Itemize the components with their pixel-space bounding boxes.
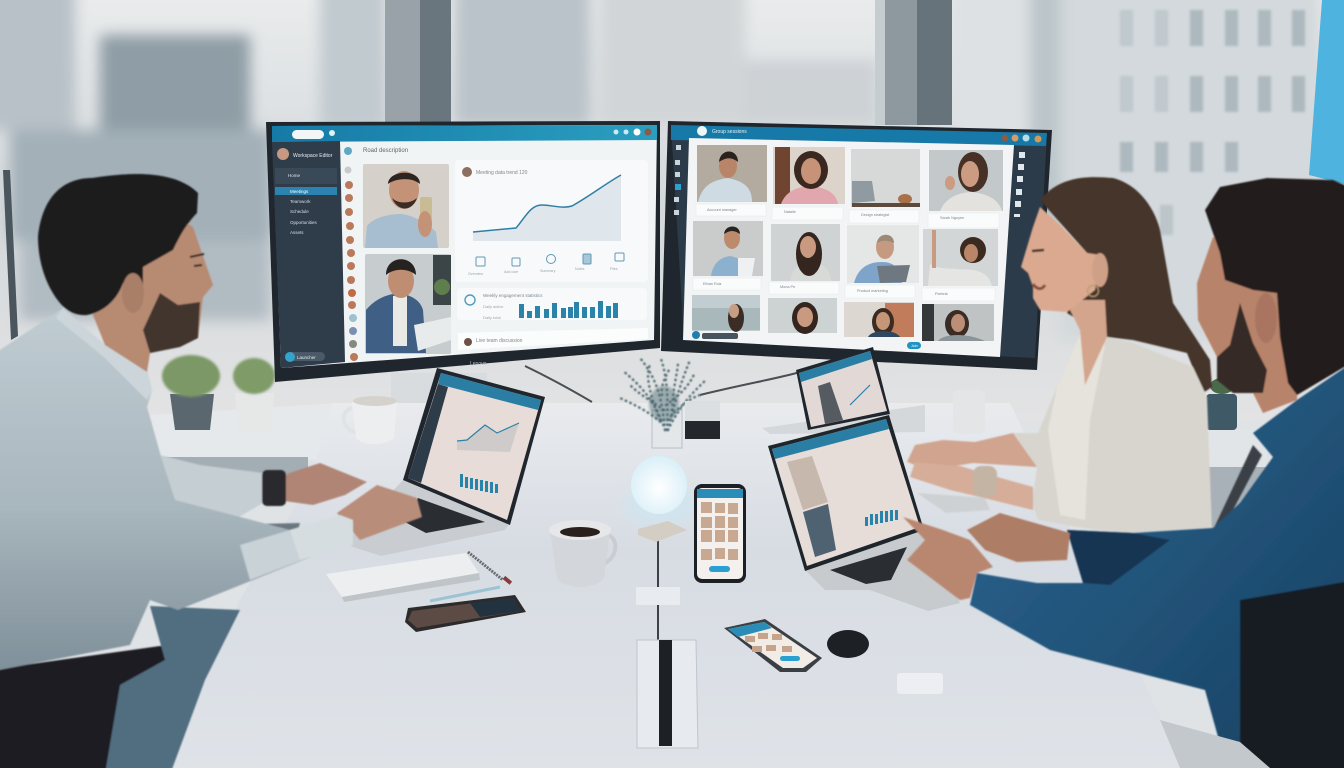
beard — [143, 293, 200, 353]
centre divider on table — [637, 540, 698, 748]
monitor: right video grid: Sarah Nguyen — [940, 216, 964, 220]
icon: plant white pot — [233, 358, 275, 432]
window frames — [3, 0, 1344, 340]
call toolbar: Join — [911, 344, 918, 348]
far sleeve shadow — [1067, 530, 1170, 585]
laptop behind — [917, 493, 990, 513]
call toolbar — [692, 331, 921, 349]
foliage — [620, 356, 706, 430]
bar chart card: Weekly engagement statistics — [483, 293, 543, 298]
hair — [1205, 178, 1344, 395]
hoop earring — [1088, 286, 1098, 296]
person: woman — [907, 177, 1212, 533]
smile — [1033, 284, 1045, 289]
shirt body — [0, 308, 353, 672]
chart card: Overview — [468, 272, 483, 276]
tile row 1 — [697, 145, 1003, 211]
bar chart card: Daily total — [483, 315, 501, 320]
chart card — [455, 160, 648, 282]
neck and face — [87, 215, 213, 372]
keyboard — [830, 547, 907, 584]
header title: Road description — [363, 148, 408, 154]
left sidebar icons — [674, 145, 681, 215]
monitor: right video grid: Group sessions — [712, 129, 747, 135]
monitor: right video grid: Account manager — [707, 208, 737, 212]
chart card: Add user — [504, 270, 519, 274]
gap under far arm — [200, 523, 300, 565]
near hand — [903, 517, 993, 600]
ear — [1255, 293, 1277, 343]
keyboard — [401, 498, 485, 533]
vase — [652, 410, 682, 448]
video grid panel — [683, 138, 1014, 357]
forearm near and hand — [910, 462, 1033, 510]
dark lower shadow — [1240, 580, 1344, 768]
monitor: left dashboard: Teamwork — [290, 199, 311, 204]
shelf with plants — [150, 355, 1267, 532]
monitor: left dashboard: Workspace Editor — [293, 153, 333, 159]
hair back — [1040, 177, 1212, 393]
monitor: right video grid — [661, 121, 1052, 370]
flower vase and hub — [620, 356, 720, 448]
far hand — [967, 513, 1070, 562]
table — [168, 403, 1185, 768]
monitor: left dashboard: Home — [288, 173, 301, 178]
footer card — [458, 328, 648, 350]
footer card: Live team discussion — [476, 338, 523, 344]
chart card: Summary — [540, 269, 556, 273]
chart card: Meeting data trend 120 — [476, 170, 528, 176]
monitor: right video grid: Patricia — [935, 292, 949, 296]
hub device — [685, 401, 720, 421]
jeans — [104, 606, 240, 768]
phone flat left — [405, 595, 526, 632]
tile row 2 — [693, 221, 998, 286]
window grid of right building — [1120, 10, 1305, 235]
shirt torso — [970, 360, 1344, 768]
chart card: Notes — [575, 267, 585, 271]
laptop: left person — [350, 368, 545, 556]
face — [1021, 207, 1100, 312]
monitor: left dashboard: Opportunities — [290, 220, 318, 225]
far sleeve — [160, 455, 263, 530]
right sidebar icons — [1014, 152, 1025, 217]
base — [805, 530, 960, 611]
collar — [56, 308, 152, 400]
bar chart card — [457, 288, 647, 320]
cuff — [290, 515, 353, 560]
hand on laptop — [277, 463, 367, 505]
tile labels row 2 — [693, 278, 995, 301]
screen frame — [768, 415, 924, 571]
person: left man — [0, 174, 422, 768]
avatar column — [344, 147, 358, 361]
bar chart card: Daily active — [483, 304, 504, 309]
top bar — [272, 125, 657, 142]
monitor: left dashboard: Meetings — [290, 189, 309, 194]
sidebar — [272, 141, 345, 368]
small remote — [897, 673, 943, 694]
person: right man — [903, 178, 1344, 768]
laptop: front right — [768, 415, 960, 611]
table tag — [636, 587, 680, 605]
mesh chair — [1213, 445, 1262, 530]
chair — [0, 646, 179, 768]
forearm far — [907, 433, 1037, 470]
near sleeve highlight — [240, 517, 353, 580]
blouse light panel — [1048, 330, 1105, 520]
laptop base — [350, 478, 509, 556]
wireless earbud case — [827, 630, 869, 658]
ear — [1092, 253, 1108, 287]
video tile: man with phone — [363, 164, 449, 248]
phone flat right — [724, 619, 822, 672]
icon: plant right pot — [1206, 378, 1237, 430]
neck — [1065, 300, 1107, 385]
neck and face — [1197, 237, 1300, 413]
monitor: right video grid: Design strategist — [861, 213, 890, 217]
monitor: left dashboard: Launcher — [297, 355, 316, 360]
monitor: left dashboard — [266, 121, 660, 382]
monitor: right video grid: Ethan Ruiz — [703, 282, 722, 286]
watch woman — [973, 466, 997, 497]
eye — [1032, 250, 1044, 251]
eye and brow — [190, 254, 204, 266]
icon: plant grey pot — [162, 355, 220, 430]
hair — [38, 174, 198, 315]
laptop: back centre right — [762, 347, 925, 434]
monitor: right video grid: Mona Pe — [780, 285, 795, 289]
video tile: man with tablet — [365, 254, 451, 354]
ear — [122, 273, 144, 313]
glowing lamp — [624, 456, 696, 542]
smartphone upright — [694, 484, 746, 583]
beard — [1217, 303, 1267, 393]
notebook and pens — [326, 552, 512, 602]
screen frame — [403, 368, 545, 525]
hand typing — [337, 485, 422, 540]
monitor brand label: Lenovo — [470, 361, 487, 367]
coffee cup: back left — [344, 396, 397, 444]
watch — [262, 470, 286, 506]
monitor: right video grid: Product marketing — [857, 289, 888, 293]
chart card: Files — [610, 267, 618, 271]
monitor: left dashboard: Schedule — [290, 209, 309, 214]
cup: back right — [953, 390, 985, 434]
window background: blurred city skyline — [0, 0, 1344, 420]
tile labels row 1 — [696, 204, 999, 228]
monitor: right video grid: Natalie — [784, 210, 796, 214]
tile row 3 — [692, 295, 994, 341]
coffee cup: centre — [549, 520, 615, 587]
left monitor screen — [272, 125, 657, 368]
chair right — [1160, 720, 1270, 768]
monitor: left dashboard: Assets — [290, 230, 304, 235]
area chart — [473, 175, 621, 241]
monitor stands and cables — [391, 366, 800, 445]
icon row — [476, 253, 624, 266]
blouse — [1013, 330, 1212, 533]
